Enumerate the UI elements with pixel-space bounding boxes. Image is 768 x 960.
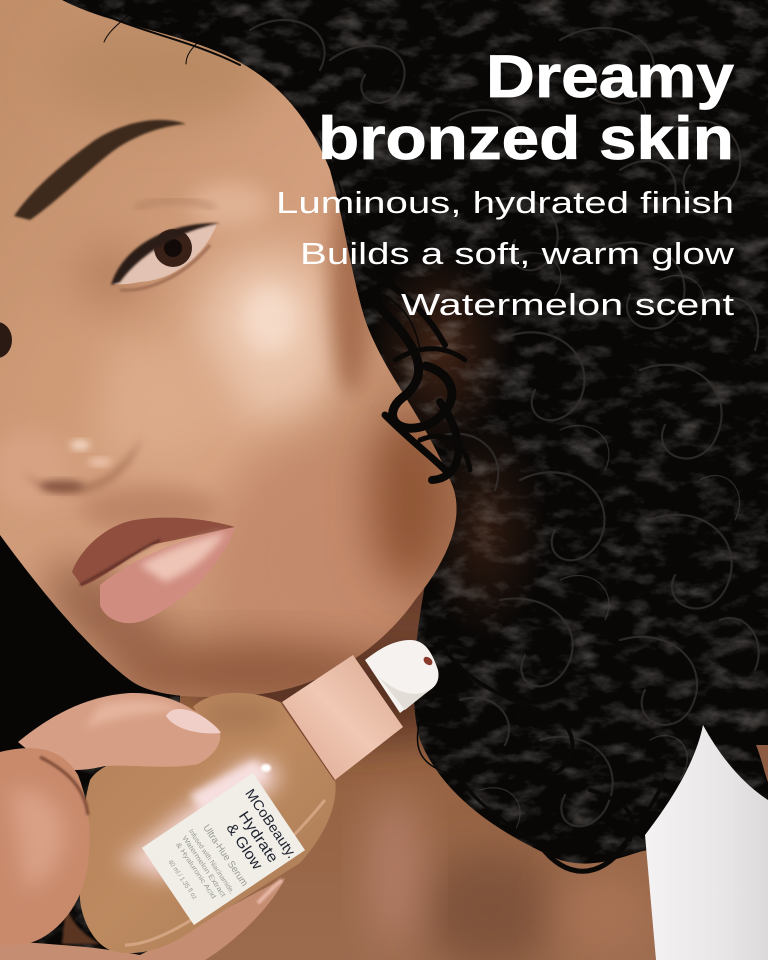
benefits list: Builds a soft, warm glow (300, 236, 735, 271)
heading: Dreamy (486, 43, 735, 110)
eyebrow (14, 120, 186, 220)
pump (365, 640, 439, 713)
heading: bronzed skin (318, 105, 734, 172)
heading (318, 43, 735, 172)
hand: lower fingers behind bottle (0, 878, 285, 960)
hand: thumb and fist (0, 693, 221, 945)
product name: Hydrate (235, 808, 281, 866)
product label: & Glow (223, 820, 266, 873)
nose shadow (29, 444, 140, 496)
white top (645, 725, 768, 960)
eye (111, 200, 220, 290)
thumbnail (166, 709, 221, 733)
benefits list (276, 185, 735, 322)
body (80, 693, 336, 953)
product details: Ultra-Hue Serum (200, 823, 250, 889)
face-framing curls (80, 0, 665, 871)
product label: 40 ml / 1.35 fl oz (166, 859, 198, 901)
collar (282, 655, 403, 780)
product label: Watermelon Extract (180, 835, 227, 899)
lips (72, 518, 235, 623)
benefits list: Luminous, hydrated finish (276, 185, 734, 220)
product label (142, 773, 305, 925)
face (0, 0, 480, 710)
product label: & Hyaluronic Acid (174, 842, 217, 900)
product label: Infused with Niacinamide, (187, 828, 235, 895)
serum bottle (80, 640, 439, 953)
brand name: MCoBeauty. (242, 786, 300, 861)
left eye sliver (0, 322, 12, 358)
benefits list: Watermelon scent (401, 287, 735, 322)
neck (180, 580, 670, 960)
